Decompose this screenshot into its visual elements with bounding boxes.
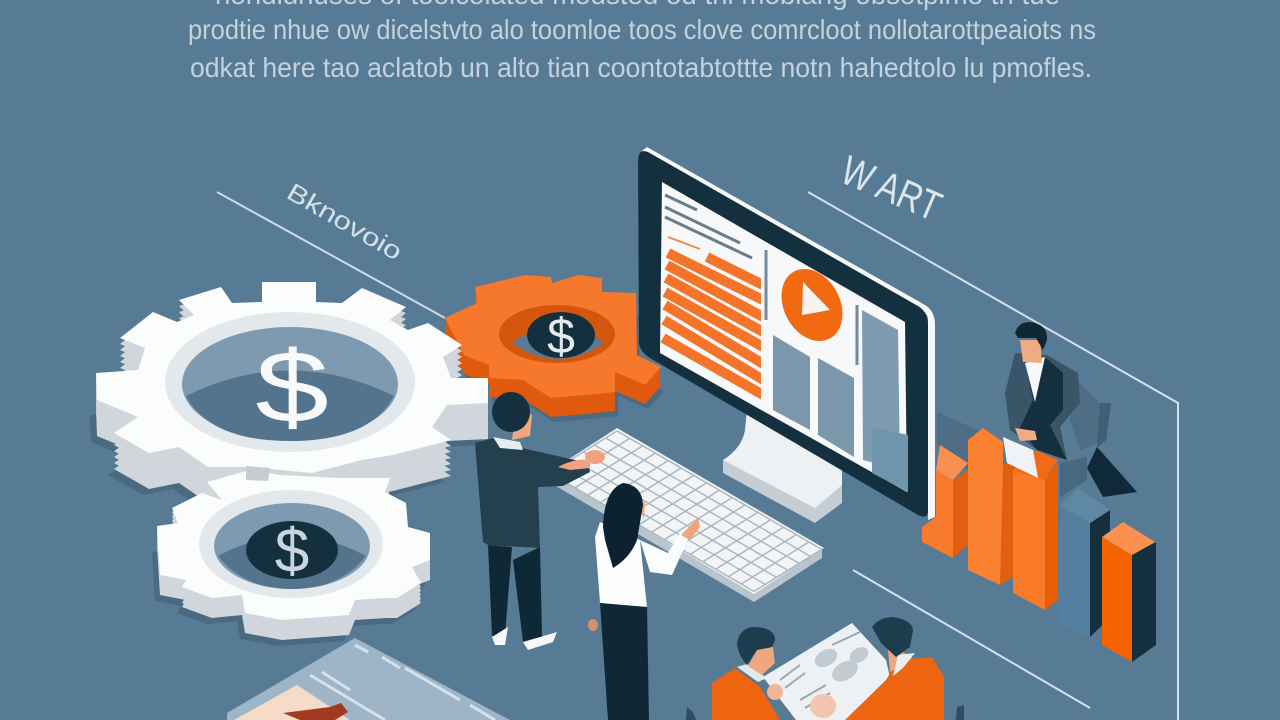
- intro text block: odkat here tao aclatob un alto tian coontotabtottte notn hahedtolo lu pmofles.: [190, 52, 1092, 83]
- intro text block: prodtie nhue ow dicelstvto alo toomloe toos clove comrcloot nollotarottpeaiots ns: [188, 14, 1096, 45]
- head: [512, 408, 532, 440]
- screen pie chart: [769, 258, 855, 352]
- document tablet: [227, 638, 510, 720]
- icon: orange gear with dollar: $: [547, 308, 575, 364]
- icon: small white gear with dollar: $: [275, 517, 309, 586]
- hand: [558, 460, 590, 470]
- bar 2: [968, 428, 1013, 585]
- guide line and label: left: [217, 178, 445, 318]
- newspaper: [763, 623, 893, 720]
- person: woman at keyboard: [588, 483, 700, 720]
- monitor stand: [723, 410, 842, 523]
- monitor screen: [660, 182, 907, 492]
- icon: orange gear with dollar: [445, 275, 664, 422]
- intro text block: [188, 0, 1096, 83]
- shadow behind bars: [937, 378, 1111, 470]
- seated man: [1005, 322, 1137, 497]
- right reader: [845, 617, 944, 720]
- trousers and shoes: [488, 545, 512, 636]
- jacket and arm: [475, 438, 590, 548]
- screen dividers: [766, 250, 857, 365]
- screen bars: [773, 310, 908, 492]
- monitor bezel: [642, 147, 935, 520]
- bar 5: [1102, 522, 1156, 662]
- monitor: [638, 147, 935, 523]
- screen text header: [665, 195, 752, 258]
- bar 4: [1058, 488, 1110, 637]
- icon: small white gear with dollar: [152, 466, 430, 646]
- icon: large white gear with dollar: [90, 282, 488, 515]
- guide lines and label: right frame: [808, 146, 1178, 720]
- screen orange table: [663, 253, 765, 396]
- icon: large white gear with dollar: $: [255, 331, 329, 444]
- chair backs: [686, 705, 964, 720]
- keyboard: [549, 428, 824, 602]
- guide line and label: left: Bknovoio: [282, 178, 407, 266]
- left reader: [712, 627, 780, 720]
- bar chart: isometric bars: [922, 322, 1156, 662]
- person: standing man: [475, 392, 605, 650]
- people reading newspaper: [686, 617, 964, 720]
- bar 3: [1003, 437, 1058, 610]
- guide lines and label: right frame: W ART: [835, 146, 948, 230]
- bar 1: [922, 445, 968, 558]
